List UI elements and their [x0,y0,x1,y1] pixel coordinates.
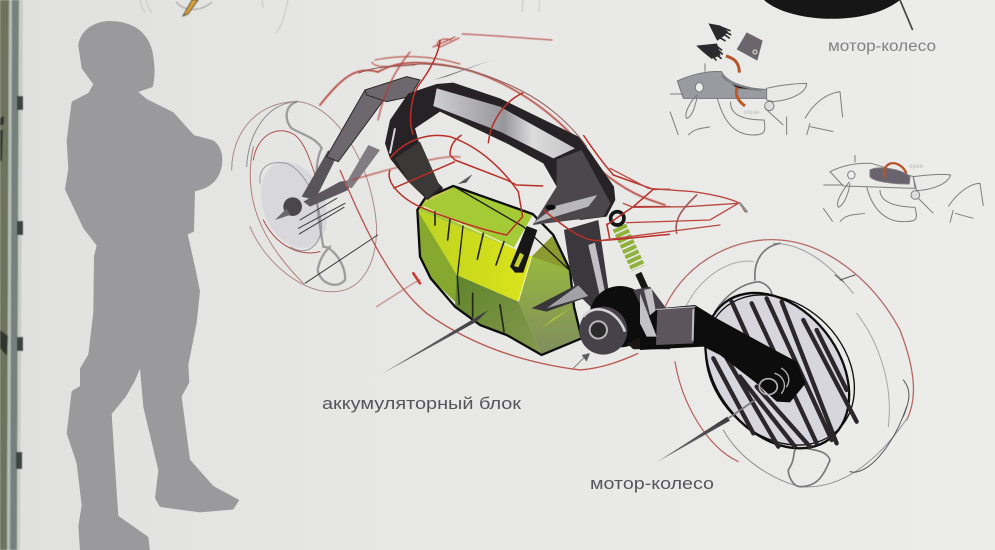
human silhouette for scale [65,21,239,550]
battery faces [417,186,533,248]
arrow: open curl [884,163,907,177]
label: battery block: аккумуляторный блок [322,394,522,413]
top sketch fragment: key [140,0,540,34]
pointer to top of battery [458,175,472,184]
panel frame at left edge [0,0,23,550]
disc spokes [713,298,857,447]
swing arm [640,305,806,402]
pivot hub [589,286,651,347]
arrow: close down [726,56,739,73]
fork arms [302,150,335,200]
red overlay contours [389,40,670,241]
label: motor wheel, upper right: мотор-колесо [828,38,936,55]
icon: wallet [737,32,763,61]
battery vents [435,212,504,332]
axle [759,379,777,395]
label: motor wheel: мотор-колесо [590,474,714,493]
lower frame pillar [564,220,611,310]
front wheel sketch [232,77,420,307]
outer tyre curves [665,240,913,420]
battery outline [417,186,582,355]
labelled detail diagrams, upper right [670,0,983,223]
shock absorber [611,212,646,290]
pointer from label to battery [382,310,488,374]
seat diagram: open [823,155,983,223]
arrow: close curl [736,87,745,106]
battery block [340,40,670,374]
infographic canvas: open [909,164,924,170]
rear tail red contours [603,168,747,240]
small diagram captions: close [744,110,760,116]
battery bracket [510,226,537,273]
icon: gloves [697,24,731,60]
wheel disc [676,265,879,476]
pointer from label to wheel [657,417,730,462]
speed lines [298,198,378,283]
rear wheel sketch [640,240,913,487]
large tyre fragment [764,0,900,19]
red contour sketch of bodywork [320,34,665,205]
frame arc [385,83,615,220]
seat diagram: close [670,63,843,135]
disc [249,152,339,258]
pointer line to label [900,0,913,30]
